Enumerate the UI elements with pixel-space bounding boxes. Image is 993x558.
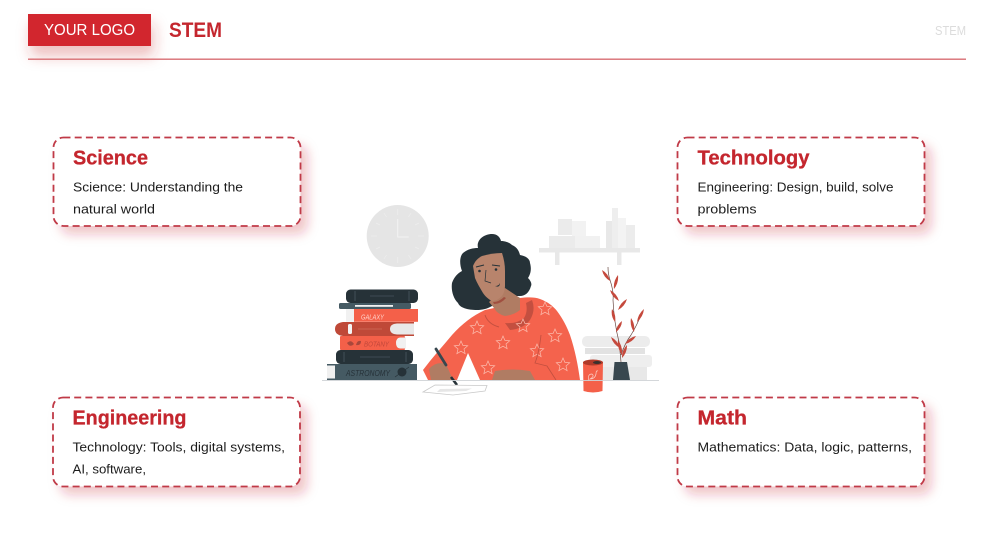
book title: botany: BOTANY [364,340,390,348]
icon: wall shelf [539,208,640,265]
text: technology description: Engineering: Design, build, solve [698,180,894,194]
logo badge: YOUR LOGO [44,22,135,39]
text: technology description: problems [698,202,757,216]
character: woman [423,234,580,385]
text: science description: natural world [73,202,155,216]
heading: technology: Technology [698,146,810,170]
illustration: woman writing at desk [322,205,659,395]
sweater stars [454,302,570,374]
text: technology description [698,180,894,216]
header right label: STEM [935,24,966,38]
sweater [423,297,580,380]
text: science description [73,180,243,216]
book title: galaxy: GALAXY [361,312,385,322]
icon: background books [582,336,652,380]
hair [452,234,531,310]
text: science description: Science: Understanding the [73,180,243,194]
table line [322,379,659,382]
icon: vase [613,362,630,380]
panel: math [678,398,924,486]
icon: plant [602,267,644,362]
icon: book stack [327,290,418,380]
icon: wall clock [367,205,429,267]
panel: science [54,138,300,226]
title: STEM [169,19,222,42]
text: engineering description: Technology: Tools, digital systems, [72,440,285,454]
panel: technology [678,138,924,226]
text: engineering description [72,440,285,476]
neck [489,288,520,316]
book title: astronomy: ASTRONOMY [345,368,391,378]
face [473,253,505,301]
icon: coffee mug [583,360,603,392]
header [28,14,966,60]
text: math description: Mathematics: Data, logic, patterns, [698,440,912,454]
heading: engineering: Engineering [72,406,186,430]
collar [505,300,534,330]
icon: paper [423,385,487,395]
heading: math: Math [698,406,747,430]
panel: engineering [53,398,300,486]
logo badge [28,14,151,46]
heading: science: Science [73,146,148,170]
pen [436,349,457,385]
hands [429,363,535,380]
text: engineering description: AI, software, [72,462,146,476]
